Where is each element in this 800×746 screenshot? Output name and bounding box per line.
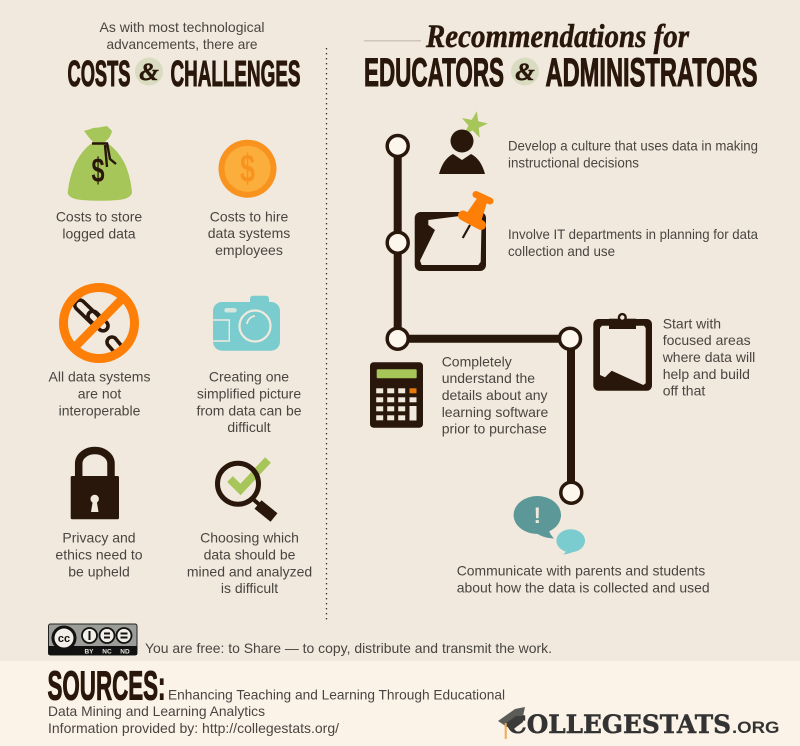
text: start with focused areas: help and build [663, 366, 750, 382]
label: choosing data [187, 530, 312, 596]
text: start with focused areas: off that [663, 383, 705, 399]
label: privacy: ethics need to [55, 546, 143, 562]
heading: costs and challenges: COSTS [68, 53, 130, 94]
heading: costs and challenges [68, 53, 300, 94]
logo: collegestats.org: COLLEGESTATS [507, 710, 731, 739]
icon: money bag: $ [92, 152, 105, 190]
source text: Enhancing Teaching and Learning Through Educational [168, 686, 505, 702]
intro text: advancements, there are [106, 36, 258, 52]
label: simplified picture: difficult [227, 419, 271, 435]
text: communicate [457, 563, 710, 596]
icon: coin: $ [240, 147, 255, 191]
label: interoperable: interoperable [59, 402, 141, 418]
label: choosing data: is difficult [221, 580, 278, 596]
icon: speech bubbles [514, 496, 585, 554]
icon: creative commons badge: cc [58, 633, 70, 645]
icon: money bag [68, 126, 132, 201]
heading: costs and challenges: & [139, 59, 159, 86]
label: simplified picture: simplified picture [197, 386, 301, 402]
panel: footer sources [0, 661, 800, 746]
label: choosing data: data should be [204, 546, 296, 562]
label: costs to store: logged data [62, 226, 136, 242]
label: interoperable: All data systems [49, 368, 150, 384]
timeline path [387, 136, 582, 503]
text: completely understand: learning software [442, 404, 549, 420]
text: start with focused areas: Start with [663, 316, 721, 332]
source text: Information provided by: http://collegestats.org/ [48, 720, 339, 736]
label: privacy: be upheld [68, 564, 130, 580]
icon: creative commons badge [48, 624, 137, 656]
icon: creative commons badge: BY [84, 648, 94, 656]
label: choosing data: Choosing which [200, 530, 299, 546]
text: communicate: Communicate with parents and students [457, 563, 705, 579]
heading: educators and administrators: & [515, 59, 535, 86]
icon: person with star [439, 109, 490, 174]
text: completely understand: Completely [442, 354, 512, 370]
text: involve IT: Involve IT departments in planning for data [508, 226, 758, 242]
icon: calculator [370, 362, 423, 428]
intro text [100, 19, 264, 52]
heading: educators and administrators: EDUCATORS [364, 51, 504, 95]
label: simplified picture: Creating one [209, 368, 289, 384]
icon: speech bubbles: ! [534, 503, 541, 528]
source text: Data Mining and Learning Analytics [48, 703, 265, 719]
text: develop a culture [508, 138, 758, 170]
label: costs to hire [208, 208, 290, 258]
text: start with focused areas [662, 316, 755, 399]
label: interoperable: are not [78, 386, 121, 402]
icon: padlock [71, 451, 119, 519]
label: costs to store: Costs to store [56, 208, 142, 224]
text: develop a culture: instructional decisions [508, 154, 639, 170]
panel: costs and challenges [49, 19, 312, 596]
text: communicate: about how the data is collected and used [457, 580, 710, 596]
source text [48, 686, 505, 736]
icon: board with pushpin [415, 194, 490, 271]
label: costs to store [56, 208, 142, 242]
label: costs to hire: employees [215, 242, 283, 258]
text: completely understand [442, 354, 549, 437]
label: simplified picture: from data can be [196, 402, 302, 418]
icon: camera [213, 296, 280, 351]
text: involve IT [508, 226, 758, 259]
script heading: recommendations for: Recommendations for [425, 19, 690, 55]
text: start with focused areas: focused areas [663, 332, 751, 348]
logo: collegestats.org: .ORG [732, 718, 780, 737]
text: completely understand: understand the [442, 370, 535, 386]
text: start with focused areas: where data will [662, 349, 755, 365]
icon: clipboard [593, 314, 652, 391]
label: privacy: Privacy and [62, 530, 136, 546]
label: simplified picture [196, 368, 302, 435]
icon: coin [218, 140, 276, 198]
icon: magnifier with check [218, 460, 274, 518]
label: privacy [55, 530, 143, 580]
icon: broken chain in ban sign [64, 288, 134, 358]
text: completely understand: details about any [442, 387, 548, 403]
icon: creative commons badge: ND [120, 648, 130, 656]
intro text: As with most technological [100, 19, 264, 35]
label: choosing data: mined and analyzed [187, 564, 312, 580]
label: costs to hire: data systems [208, 225, 290, 241]
heading: educators and administrators [364, 51, 758, 95]
text: develop a culture: Develop a culture that uses data in making [508, 138, 758, 154]
label: interoperable [49, 368, 150, 418]
heading: sources: SOURCES: [48, 662, 166, 708]
license text: You are free: to Share — to copy, distribute and transmit the work. [145, 640, 552, 656]
label: costs to hire: Costs to hire [210, 208, 289, 224]
text: involve IT: collection and use [508, 243, 615, 259]
panel: recommendations [364, 19, 758, 596]
icon: creative commons badge: NC [102, 648, 112, 656]
heading: costs and challenges: CHALLENGES [170, 53, 300, 94]
text: completely understand: prior to purchase [442, 421, 547, 437]
